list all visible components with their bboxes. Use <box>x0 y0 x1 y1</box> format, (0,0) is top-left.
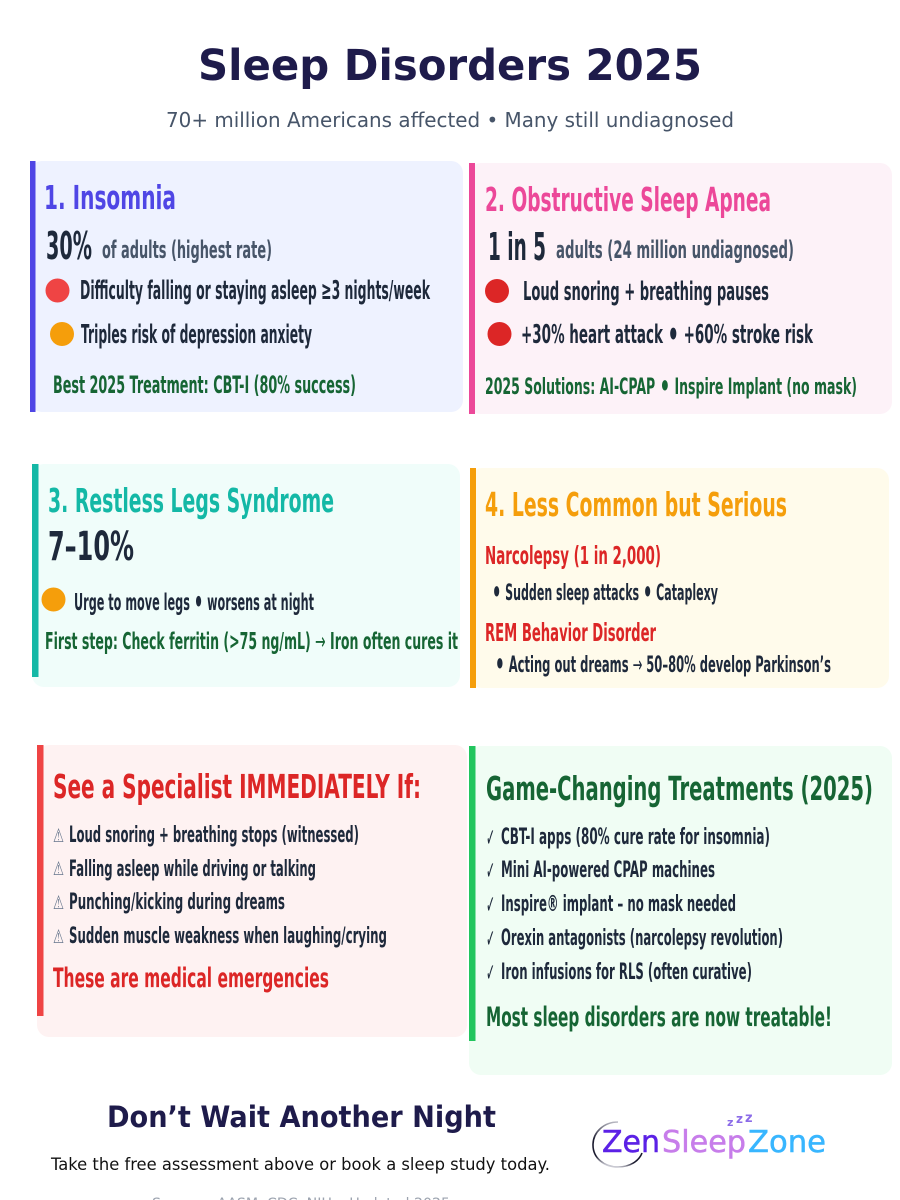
call to action heading: Don’t Wait Another Night <box>107 1100 496 1134</box>
panel: less common but serious <box>470 468 889 688</box>
warning list <box>53 823 387 949</box>
treatment list: ✓ <box>486 856 495 885</box>
warning list: Loud snoring + breathing stops (witnessed) <box>69 823 359 848</box>
warning list: Punching/kicking during dreams <box>69 890 285 915</box>
warning list: ⚠ <box>53 858 64 880</box>
stat: 30%: 30% <box>46 224 92 268</box>
call to action text: Take the free assessment above or book a sleep study today. <box>50 1155 550 1175</box>
warning list: ⚠ <box>53 825 64 847</box>
treatment list: ✓ <box>486 958 495 987</box>
first step text: First step: Check ferritin (>75 ng/mL) → Iron often cures it <box>45 629 458 655</box>
treatment list: Mini AI-powered CPAP machines <box>501 858 715 883</box>
panel: obstructive sleep apnea: 1 in 5 <box>488 225 546 269</box>
subheading: REM behavior disorder: REM Behavior Disorder <box>485 618 656 647</box>
warning list: Sudden muscle weakness when laughing/crying <box>69 924 387 949</box>
logo: ZenSleepZone: z <box>727 1116 733 1129</box>
warning list: ⚠ <box>53 926 64 948</box>
heading: insomnia: 1. Insomnia <box>44 178 176 217</box>
icon: orange dot <box>50 322 74 346</box>
panel: restless legs syndrome <box>32 464 460 687</box>
logo: ZenSleepZone: z <box>745 1111 753 1126</box>
icon: red dot <box>46 278 70 302</box>
REM detail: • <box>495 648 505 682</box>
solutions text: • <box>660 370 670 404</box>
logo: ZenSleepZone: Sleep <box>662 1125 746 1160</box>
icon: orange dot <box>42 588 66 612</box>
logo: ZenSleepZone: Zen <box>602 1125 660 1160</box>
panel: restless legs syndrome: worsens at night <box>203 590 314 616</box>
treatment list: ✓ <box>486 823 495 852</box>
logo: ZenSleepZone <box>593 1111 826 1167</box>
symptom text: • <box>194 586 203 620</box>
logo: ZenSleepZone: Zone <box>748 1125 826 1160</box>
treatment list <box>486 823 783 987</box>
risk text: +30% heart attack <box>521 320 795 350</box>
logo: ZenSleepZone: z <box>736 1112 743 1126</box>
symptom text: Urge to move legs <box>74 590 311 616</box>
treatment list: ✓ <box>486 924 495 953</box>
panel: insomnia: Triples risk of depression anxiety <box>81 320 312 350</box>
warning list: Falling asleep while driving or talking <box>69 857 316 882</box>
panel: insomnia: Difficulty falling or staying asleep ≥3 nights/week <box>80 276 430 306</box>
panel: see a specialist <box>37 745 467 1037</box>
stat caption: of adults (highest rate) <box>102 236 272 264</box>
treatment text: Best 2025 Treatment: CBT-I (80% success) <box>53 371 356 399</box>
solutions text: 2025 Solutions: AI-CPAP <box>485 375 784 400</box>
heading: restless legs: 3. Restless Legs Syndrome <box>48 481 334 520</box>
panel: game-changing treatments <box>469 746 892 1075</box>
narcolepsy detail: • <box>643 576 652 610</box>
panel: obstructive sleep apnea <box>469 163 892 414</box>
icon: red dot <box>485 279 509 303</box>
heading: see a specialist: See a Specialist IMMEDIATELY If: <box>53 767 421 806</box>
panel: insomnia <box>30 161 463 412</box>
emergency callout: These are medical emergencies <box>53 963 329 994</box>
narcolepsy detail: Sudden sleep attacks <box>501 581 643 606</box>
treatment list: ✓ <box>486 890 495 919</box>
REM detail: Acting out dreams <box>505 653 633 678</box>
risk text: • <box>668 315 679 355</box>
icon: red dot <box>488 322 512 346</box>
subtitle: 70+ million Americans affected • Many still undiagnosed <box>166 108 734 132</box>
warning list: ⚠ <box>53 892 64 914</box>
panel: less common but serious: Cataplexy <box>652 581 718 606</box>
narcolepsy detail: • <box>492 576 501 610</box>
title: Sleep Disorders 2025 <box>198 41 702 91</box>
subheading: narcolepsy: Narcolepsy (1 in 2,000) <box>485 541 661 570</box>
stat: 7-10%: 7–10% <box>48 524 134 570</box>
